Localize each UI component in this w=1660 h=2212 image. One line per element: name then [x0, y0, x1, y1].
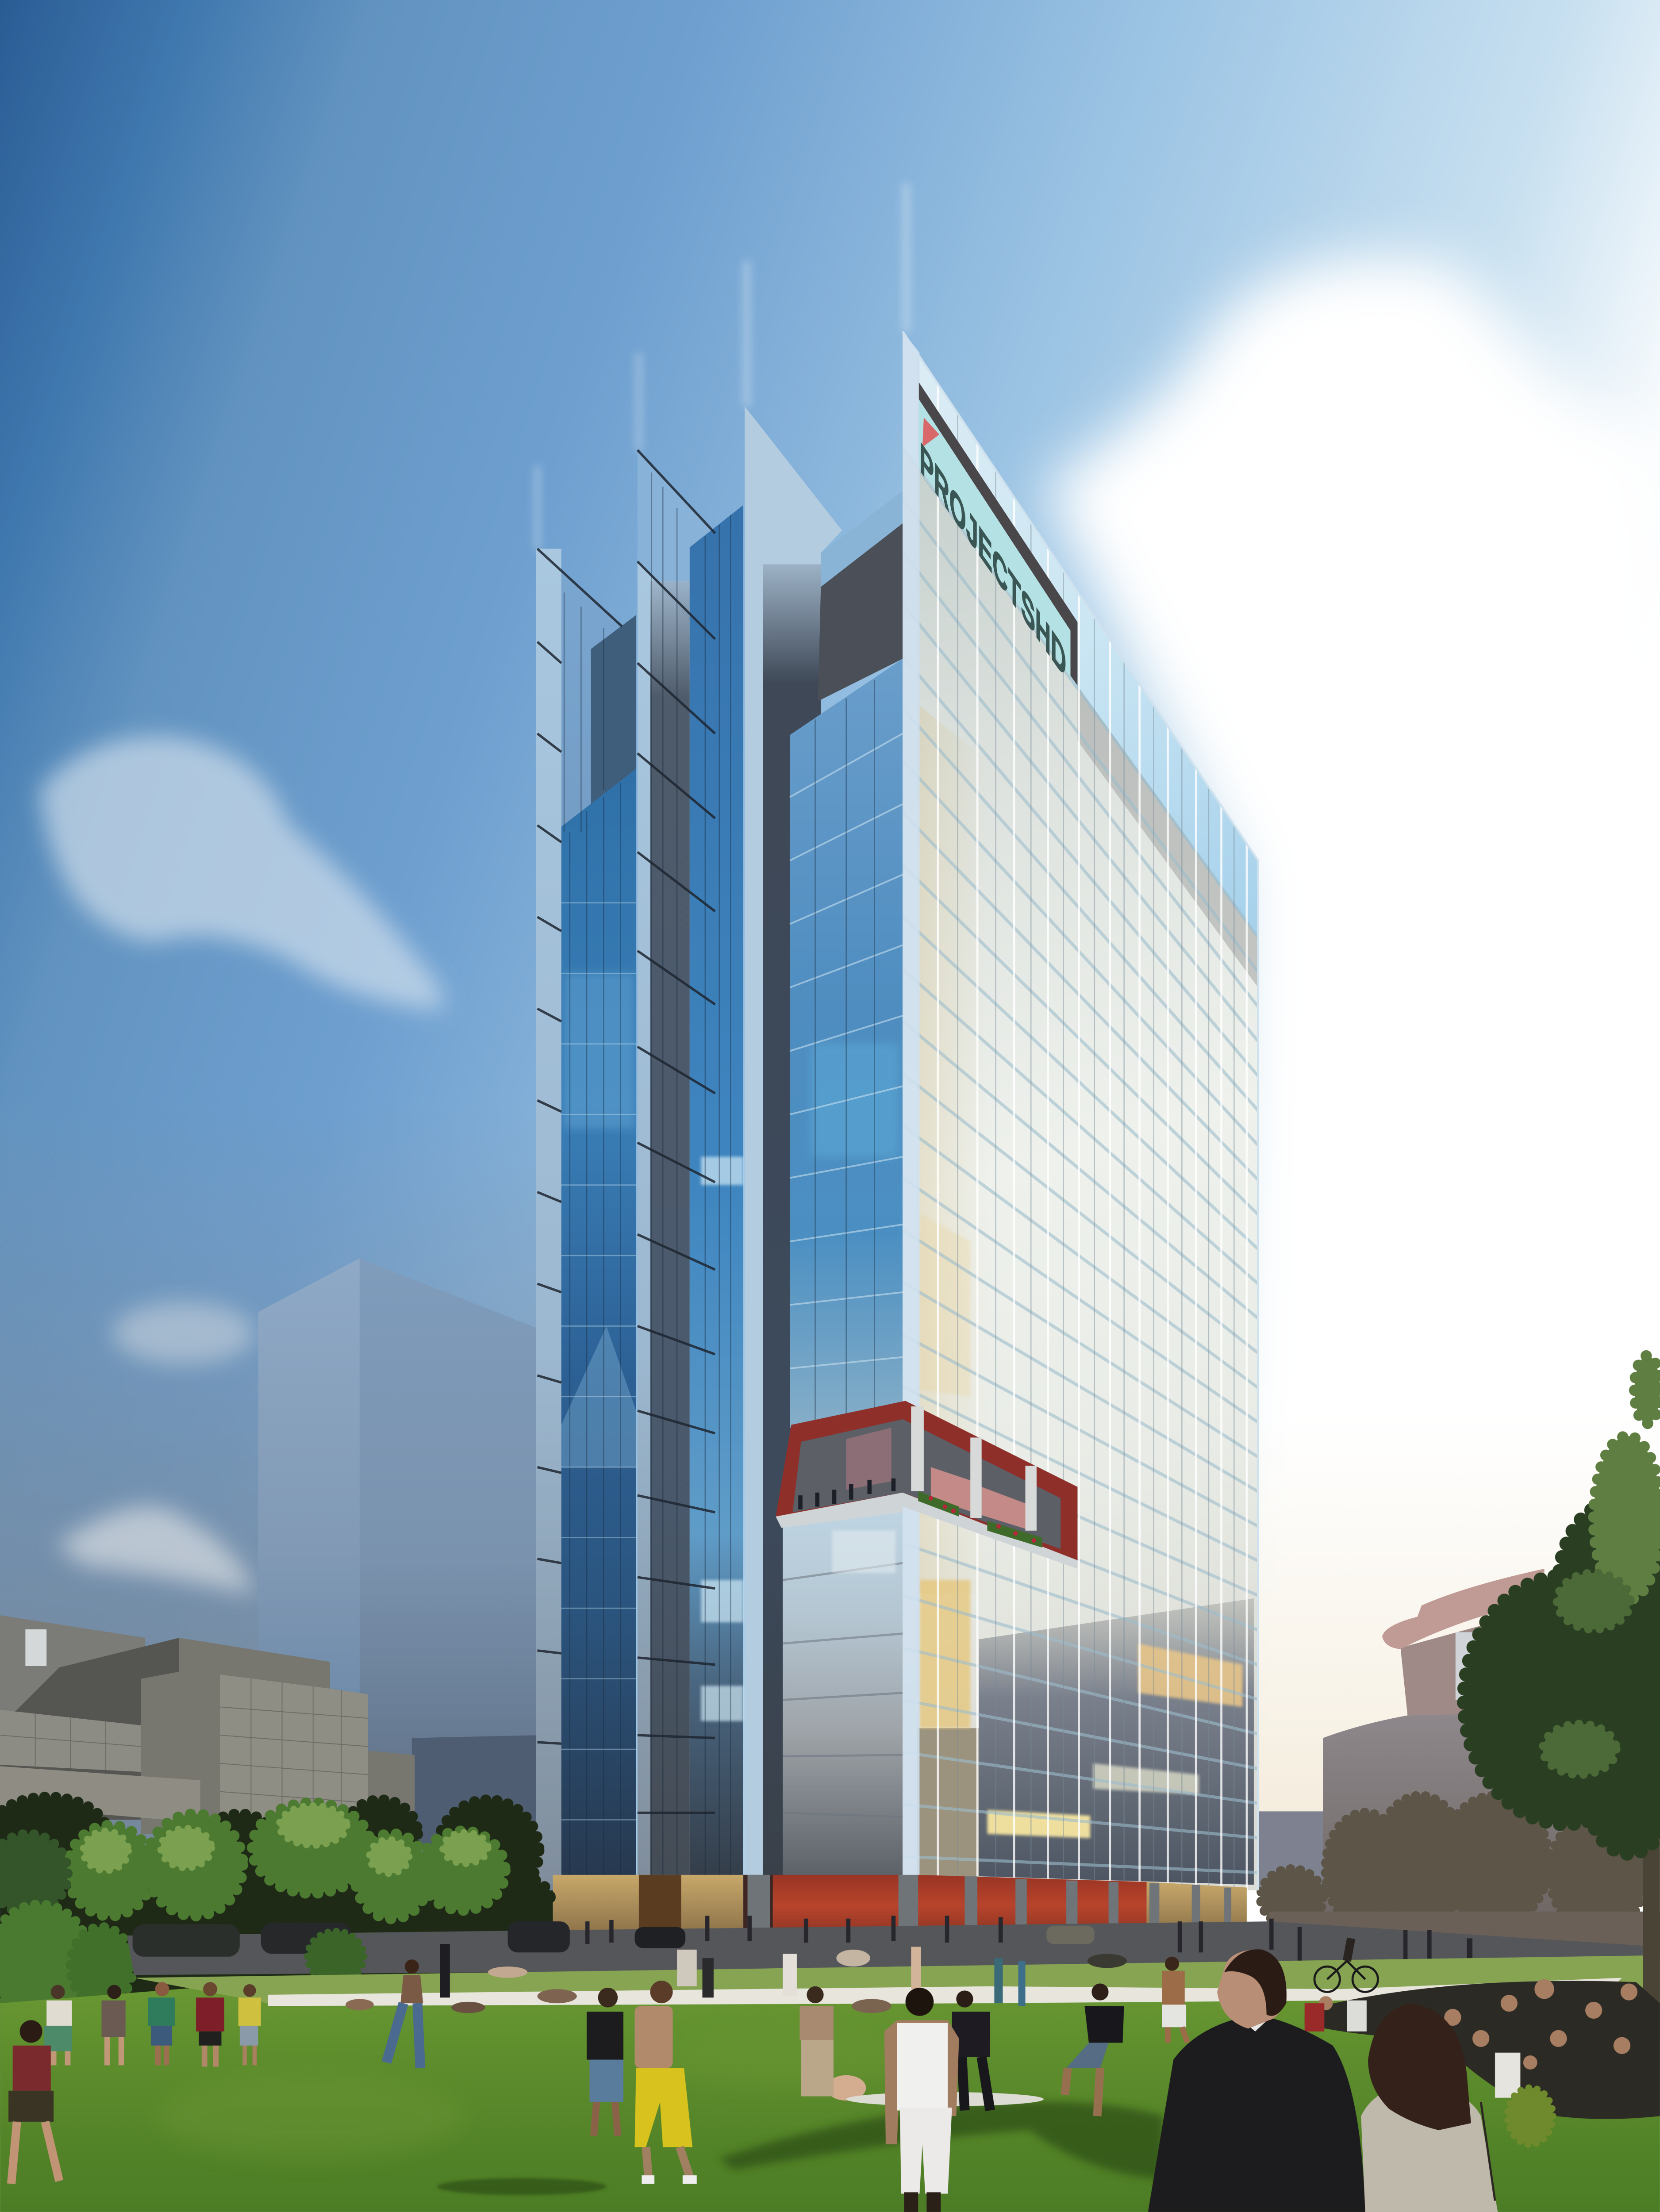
main lawn	[0, 1968, 1660, 2212]
shadow bottom	[437, 2178, 607, 2195]
facade floor bands	[903, 447, 1258, 1873]
tree shadow on grass	[719, 2102, 1164, 2180]
lower drum	[1323, 1713, 1594, 1950]
red lobby centre	[773, 1875, 900, 1937]
green mid trees	[68, 1803, 505, 1919]
terrace people	[798, 1479, 895, 1509]
second fin pale pier	[638, 561, 690, 1876]
woman in black	[952, 1990, 990, 2110]
main stepped block	[141, 1638, 415, 1834]
gold lobby east	[1147, 1882, 1247, 1936]
dark under-canopy filling the gap to the lawn	[0, 1890, 553, 2010]
light beams above the tower fins	[534, 184, 910, 550]
sunlit block face	[220, 1674, 368, 1828]
lawn	[0, 1955, 1660, 2212]
top pale glass cap	[821, 491, 903, 587]
warm left glow	[919, 705, 987, 1594]
man in white vest	[884, 1988, 959, 2212]
street crowd	[585, 1916, 1472, 1986]
upper drum	[1400, 1608, 1545, 1716]
man green shirt	[148, 1982, 175, 2065]
far lawn strip	[134, 1955, 1660, 2003]
cloud middle left	[113, 1302, 254, 1364]
lower front wing	[0, 1766, 200, 1823]
facade base colour	[903, 331, 1258, 1890]
plant near woman	[1508, 2088, 1553, 2144]
sign logo triangle	[922, 418, 939, 447]
left blue glass bay	[561, 769, 636, 1883]
fin vertical mullions	[564, 472, 874, 1883]
first fin glass	[538, 549, 636, 1883]
upper block	[0, 1615, 145, 1721]
road	[127, 1921, 1660, 1975]
grass patches	[155, 2032, 917, 2158]
man in white shorts	[1162, 1957, 1187, 2043]
shadowed mass	[0, 1638, 179, 1820]
clouds at left	[39, 736, 444, 1594]
right facade	[903, 324, 1258, 1890]
third fin pale glass	[745, 406, 842, 1890]
warm horizon glow	[1258, 1411, 1660, 1834]
blue box floor lines	[790, 733, 903, 1368]
cyan lit floors in box	[811, 1044, 899, 1157]
panel lines	[0, 1679, 368, 1828]
red sky terrace notch	[776, 1401, 1077, 1569]
warm lower left shade	[917, 1728, 979, 1879]
third fin dark strip	[763, 565, 821, 1890]
drum window	[1456, 1632, 1487, 1700]
corner pier	[903, 331, 919, 1890]
cloud lower left	[57, 1506, 254, 1594]
woman in dark	[102, 1985, 126, 2065]
reflected peak in left bay	[561, 1326, 636, 1467]
seated crowd at right	[1305, 1979, 1660, 2119]
red soffit	[776, 1401, 1077, 1560]
top dark block	[818, 523, 903, 701]
bright interior patches in blue bay	[701, 1157, 743, 1721]
man in black tank and jeans	[587, 1988, 623, 2136]
second fin upper glass	[638, 450, 715, 649]
blue glass box	[790, 659, 903, 1428]
base columns	[748, 1875, 1231, 1937]
trunk	[1643, 1665, 1660, 2039]
gold lobby west	[553, 1875, 743, 1937]
roof edge	[903, 331, 1258, 1890]
red lobby east	[918, 1875, 1147, 1936]
man in dark suit	[1148, 1949, 1365, 2212]
tree at right	[1464, 1356, 1660, 2039]
hazy trees in front of drum	[1261, 1796, 1660, 1950]
grey background tower	[258, 1258, 539, 1862]
pink roof	[1382, 1569, 1545, 1649]
roof band glass	[903, 331, 1258, 938]
ground floor base	[553, 1875, 1247, 1937]
man in yellow trousers	[634, 1981, 697, 2184]
car	[261, 1923, 351, 1954]
group at far left	[44, 1982, 261, 2067]
terrace slab	[776, 1493, 1077, 1569]
window	[25, 1629, 46, 1666]
warm office windows	[919, 1213, 1242, 1838]
lower left glass block	[783, 1498, 903, 1890]
second fin dark strip	[650, 581, 690, 1876]
woman with long hair	[1361, 2003, 1498, 2212]
car	[634, 1927, 685, 1948]
front hedge	[0, 1834, 133, 2017]
dark reflected lower floors	[979, 1598, 1254, 1885]
sign dark frame	[919, 382, 1077, 686]
dark lobby entry	[639, 1875, 681, 1937]
distant box	[1258, 1811, 1326, 1896]
blue middle bay	[690, 505, 743, 1876]
sign panel	[919, 399, 1071, 677]
distant box and drum building at right	[1258, 1569, 1594, 1950]
left bay horizontal grid	[561, 903, 636, 1820]
trees at left	[0, 1797, 553, 2017]
cloud upper left	[39, 736, 444, 1010]
man in khaki	[799, 1986, 834, 2097]
rooftop sign	[919, 382, 1077, 688]
grey first floor under roof band	[1077, 686, 1258, 987]
man red shirt	[196, 1982, 224, 2067]
low-rise stone building at left	[0, 1615, 415, 1834]
footpath	[268, 1978, 1622, 2006]
cyclist	[1314, 1938, 1378, 1992]
lower terrace wing	[0, 1710, 141, 1772]
man yellow shirt	[238, 1984, 261, 2065]
left slim pier	[536, 549, 561, 1883]
tree highlights	[83, 1806, 488, 1874]
foreground couple	[1148, 1949, 1498, 2212]
terrace back wall	[793, 1419, 1061, 1549]
car	[1046, 1926, 1095, 1944]
white cumulus cloud right of the tower	[1044, 257, 1660, 1975]
dark back trees	[0, 1797, 550, 1934]
car	[133, 1924, 240, 1957]
terrace planting	[918, 1491, 1042, 1548]
facade mullions	[938, 324, 1247, 1890]
fin floor ticks	[538, 450, 715, 1813]
car	[508, 1921, 570, 1952]
runner in jeans	[386, 1959, 423, 2068]
first fin dark core	[591, 615, 636, 832]
mid-lawn figures	[346, 1944, 1127, 2106]
street and cars	[127, 1916, 1660, 1986]
tower	[536, 324, 1258, 1937]
foliage	[1464, 1356, 1660, 1854]
bush	[307, 1931, 364, 1982]
terrace columns	[911, 1406, 924, 1491]
people on the lawn	[8, 1938, 1660, 2212]
sign wordmark: PROJECTSHD	[919, 431, 1066, 688]
man kicking ball	[1065, 1983, 1124, 2116]
woman far left foreground	[8, 2020, 59, 2184]
woman green skirt	[44, 1985, 72, 2065]
bright interior in left bay	[564, 973, 634, 1129]
